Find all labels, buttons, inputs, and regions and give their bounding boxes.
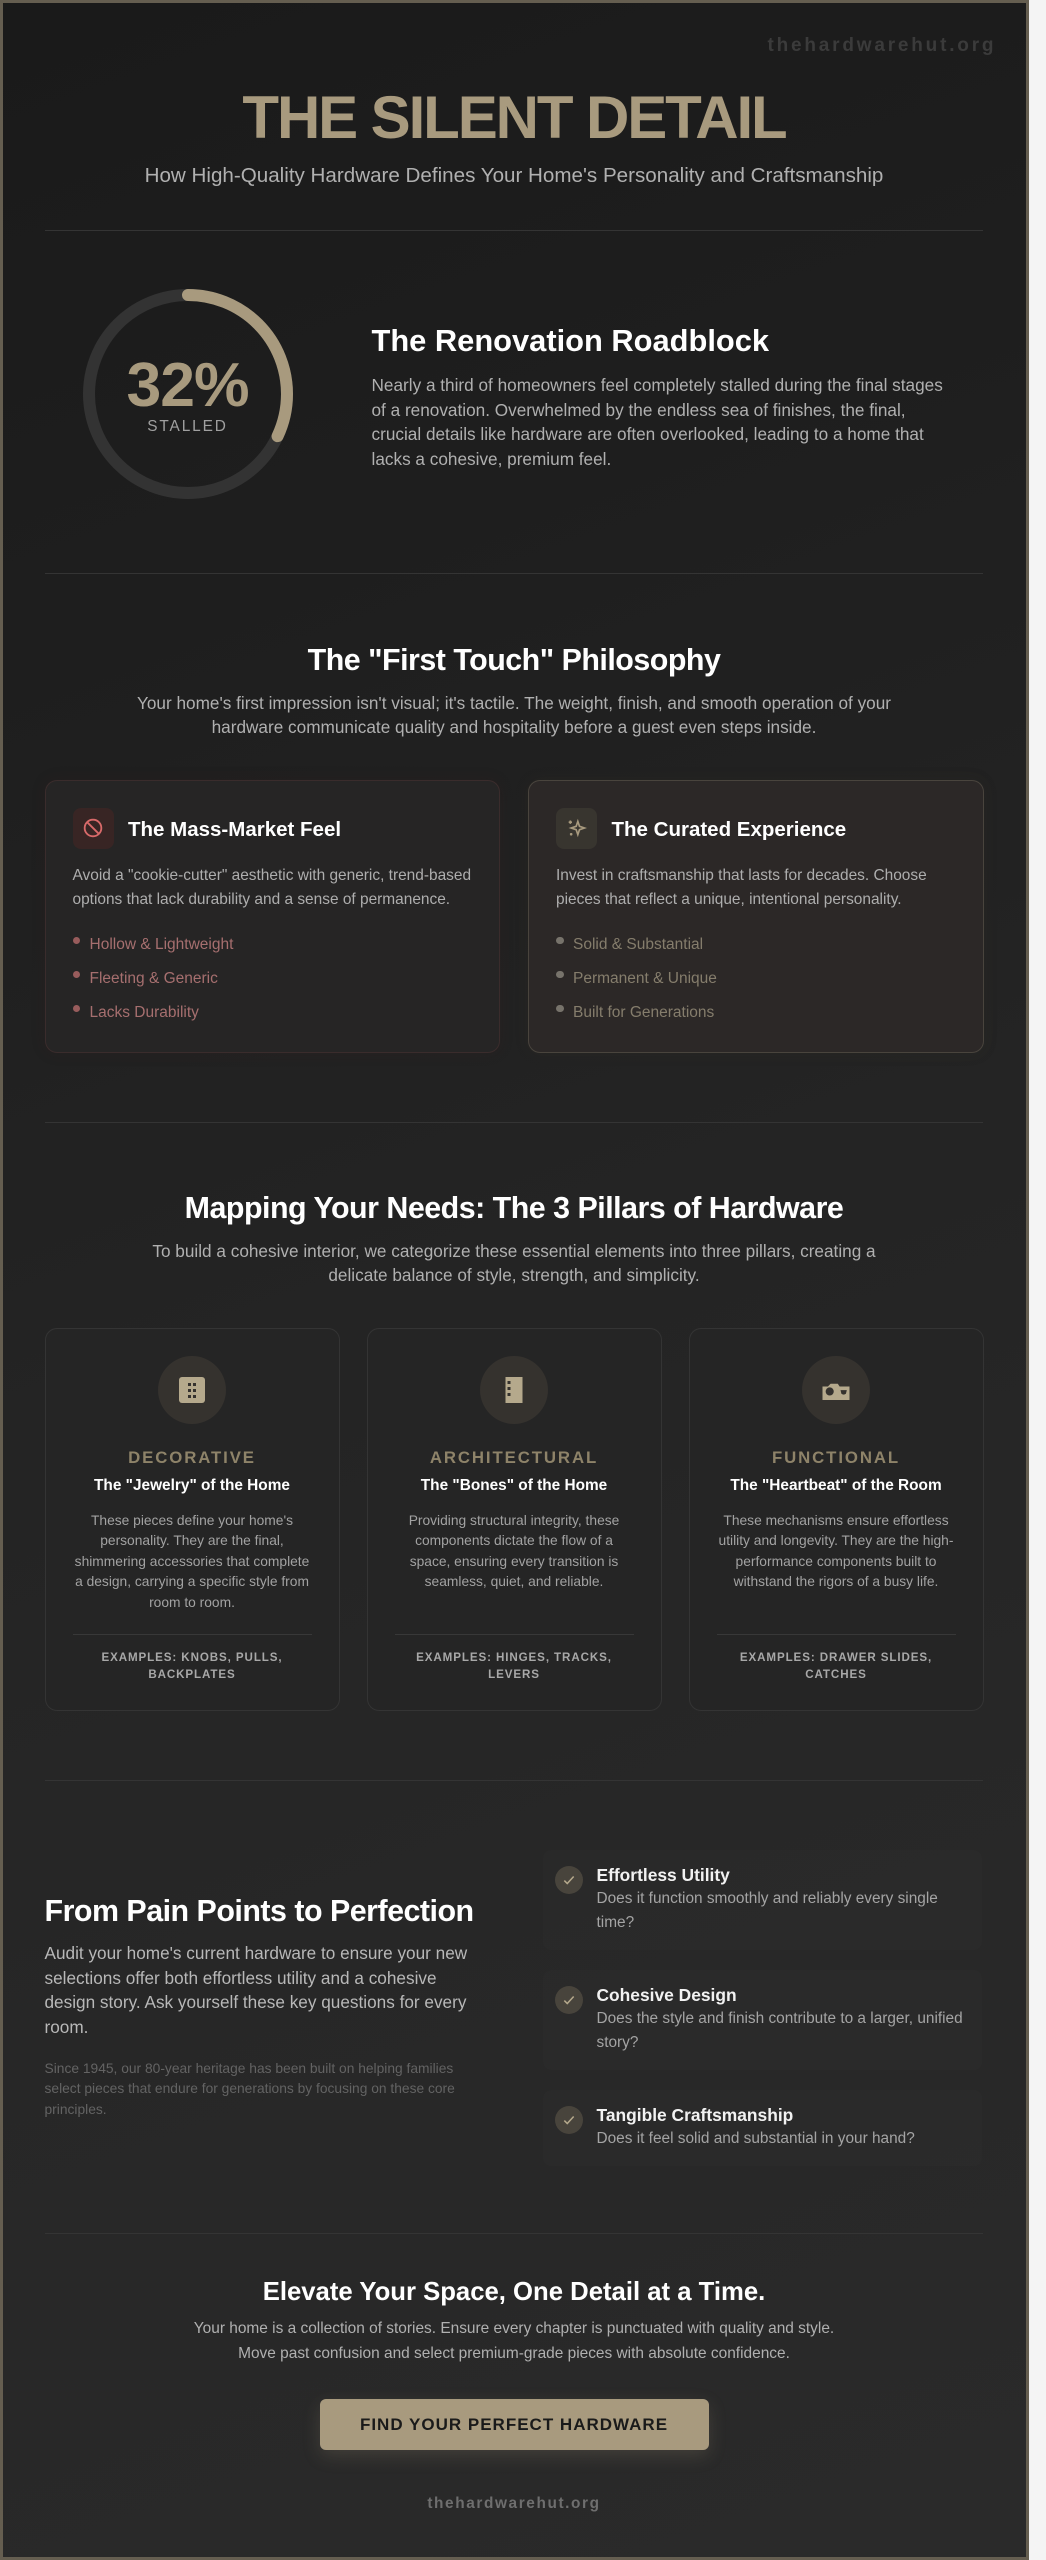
icon: sparkles [556,808,597,848]
body text [372,375,943,468]
card text [556,867,927,908]
card text: options that lack durability and a sense of permanence. [72,891,450,908]
bullet dot [72,1004,80,1012]
donut chart: 32 percent stalled [83,289,293,499]
pillar text: Providing structural integrity, these [409,1512,619,1528]
pillar text [75,1512,309,1610]
pillar examples: EXAMPLES: KNOBS, PULLS, [101,1651,283,1664]
bullet text: Permanent & Unique [573,970,717,986]
call to action button: FIND YOUR PERFECT HARDWARE [360,2414,668,2434]
card text: Invest in craftsmanship that lasts for decades. Choose [556,867,927,884]
item text [596,1890,938,1931]
bullet text: Built for Generations [573,1004,714,1020]
item text: Does it function smoothly and reliably every single [596,1890,938,1907]
pillar tagline: The "Heartbeat" of the Room [730,1476,942,1494]
closing text: Your home is a collection of stories. Ensure every chapter is punctuated with quality and style. [194,2320,834,2337]
intro text: three pillars [152,1240,876,1284]
panel: renovation roadblock stat [83,289,943,499]
heritage note [44,2060,455,2117]
intro text: first touch [137,693,891,737]
pillar text: shimmering accessories that complete [75,1554,309,1569]
bullet dot [72,970,80,978]
heading: pain points: From Pain Points to Perfection [44,1894,474,1928]
heritage note: principles. [44,2102,107,2116]
panel: mass-market feel [44,780,500,1052]
pillar text: space, ensuring every transition is [410,1554,618,1569]
body text: pain points: Audit your home's current hardware to ensure your new [44,1943,467,1963]
closing text: Move past confusion and select premium-grade pieces with absolute confidence. [238,2344,790,2362]
subtitle: How High-Quality Hardware Defines Your Home's Personality and Craftsmanship [145,164,883,186]
item text [596,2010,963,2051]
item title: Effortless Utility [596,1864,730,1884]
item title: Tangible Craftsmanship [596,2104,793,2124]
checklist item: effortless utility [542,1850,982,1950]
body text: pain points [44,1943,468,2036]
pillar examples [740,1651,932,1681]
icon: ban [72,808,114,848]
pillar text: components dictate the flow of a [415,1533,613,1548]
icon: check [554,1866,582,1894]
icon: mechanism [802,1356,870,1424]
pillar examples: LEVERS [488,1668,540,1681]
bullet dot [556,1004,564,1012]
bullet dot [556,936,564,944]
pillar name: DECORATIVE [128,1448,256,1467]
body text: of a renovation. Overwhelmed by the endless sea of finishes, the final, [372,400,906,420]
pillar tagline: The "Bones" of the Home [421,1476,607,1494]
card text: pieces that reflect a unique, intentional personality. [556,891,902,908]
heading: three pillars: Mapping Your Needs: The 3 Pillars of Hardware [185,1190,843,1224]
item text: Does it feel solid and substantial in your hand? [596,2130,915,2147]
pillar examples [101,1651,283,1681]
watermark: thehardwarehut.org [768,34,996,56]
footer url: thehardwarehut.org [427,2494,601,2512]
call to action button [320,2398,708,2450]
heritage note: Since 1945, our 80-year heritage has been built on helping families [44,2060,453,2076]
pillar tagline: The "Jewelry" of the Home [94,1476,290,1494]
intro text: first touch: hardware communicate quality and hospitality before a guest even steps inside. [212,717,816,737]
pillar text: room to room. [149,1595,235,1610]
bullet dot [72,936,80,944]
pillar text: personality. They are the final, [100,1533,284,1548]
panel: functional pillar [688,1328,984,1710]
intro text: three pillars: delicate balance of style, strength, and simplicity. [328,1264,700,1284]
pillar text [409,1512,619,1589]
body text: pain points: design story. Ask yourself these key questions for every [44,1992,466,2012]
panel: architectural pillar [366,1328,662,1710]
pillar text [719,1512,953,1589]
intro text: three pillars: To build a cohesive interior, we categorize these essential elements into three pillars, creating a [152,1240,876,1260]
card text [72,867,471,908]
pillar text: seamless, quiet, and reliable. [425,1574,603,1589]
heritage note: select pieces that endure for generations by focusing on these core [44,2081,455,2096]
pillar examples: CATCHES [805,1668,867,1681]
stat value: 32% [126,350,249,420]
bullet dot [556,970,564,978]
pillar text: utility and longevity. They are the high- [719,1533,953,1548]
body text: crucial details like hardware are often overlooked, leading to a home that [372,424,924,444]
bullet text: Lacks Durability [90,1004,199,1020]
heading: first touch: The "First Touch" Philosophy [308,642,720,676]
closing text [194,2320,834,2362]
checklist item: tangible craftsmanship [542,2090,982,2166]
bullet text: Solid & Substantial [573,936,703,952]
pillar text: performance components built to [736,1554,936,1569]
pillar text: a design, carrying a specific style from [75,1574,309,1589]
panel: curated experience [528,780,984,1052]
intro text: first touch: Your home's first impression isn't visual; it's tactile. The weight, finish, and smooth operation of your [137,693,891,713]
icon: check [554,1986,582,2014]
pillar examples [416,1651,612,1681]
card title: The Mass-Market Feel [128,818,341,840]
pillar name: ARCHITECTURAL [430,1448,598,1467]
pillar text: These mechanisms ensure effortless [723,1512,949,1528]
item text: Does the style and finish contribute to a larger, unified [596,2010,963,2027]
body text: pain points: selections offer both effortless utility and a cohesive [44,1968,437,1988]
pillar examples: BACKPLATES [148,1668,236,1681]
icon: check [554,2106,582,2134]
checklist item: cohesive design [542,1970,982,2070]
pillar examples: EXAMPLES: DRAWER SLIDES, [740,1651,932,1664]
body text: lacks a cohesive, premium feel. [372,448,611,468]
panel: decorative pillar [44,1328,340,1710]
pillar text: withstand the rigors of a busy life. [734,1574,938,1589]
icon: hinge [480,1356,548,1424]
heading: The Renovation Roadblock [372,323,769,358]
item text: time? [596,1914,634,1931]
bullet text: Hollow & Lightweight [90,936,233,952]
body text: pain points: room. [44,2016,88,2036]
bullet text: Fleeting & Generic [90,970,218,986]
closing heading: Elevate Your Space, One Detail at a Time. [263,2278,765,2306]
icon: knob plate [158,1356,226,1424]
body text: Nearly a third of homeowners feel completely stalled during the final stages [372,375,943,395]
pillar name: FUNCTIONAL [772,1448,900,1467]
item text: story? [596,2034,638,2051]
card title: The Curated Experience [612,818,846,840]
stat label: STALLED [147,418,228,434]
card text: Avoid a "cookie-cutter" aesthetic with generic, trend-based [72,867,471,884]
pillar examples: EXAMPLES: HINGES, TRACKS, [416,1651,612,1664]
item title: Cohesive Design [596,1984,737,2004]
pillar text: These pieces define your home's [91,1512,293,1528]
title: THE SILENT DETAIL [242,84,786,150]
